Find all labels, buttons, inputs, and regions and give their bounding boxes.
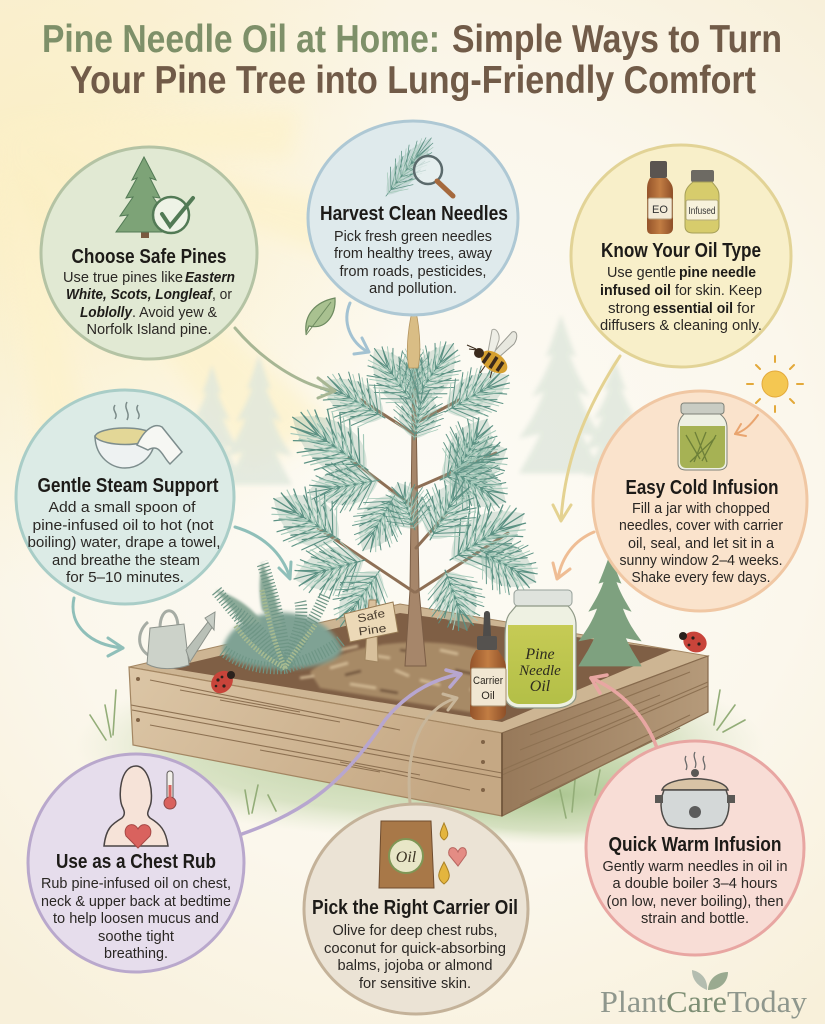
- icon: infused oil bottle: [685, 170, 719, 233]
- body text: Rub pine-infused oil on chest,: [41, 875, 231, 892]
- body text: Add a small spoon of: [48, 499, 196, 516]
- heading: Choose Safe Pines: [72, 246, 226, 268]
- body text: [41, 875, 231, 962]
- arrow: harvest to tree: [347, 303, 369, 354]
- icon: body with heart and thermometer: [104, 766, 176, 848]
- pine needle oil jar: Oil: [530, 678, 551, 695]
- icon: steam bowl: [95, 402, 182, 468]
- arrow: safe pines to tree: [235, 328, 335, 398]
- panel: easy cold infusion: [593, 391, 807, 611]
- pine tree: [257, 305, 550, 666]
- body text: Olive for deep chest rubs,: [332, 922, 498, 939]
- panel: use as a chest rub: [28, 754, 244, 972]
- body text: Eastern: [185, 269, 235, 286]
- title: Simple Ways to Turn: [452, 18, 782, 61]
- icon: EO bottle: [647, 161, 673, 234]
- body text: for: [737, 300, 755, 317]
- icon: floating leaf: [306, 298, 335, 335]
- body text: needles, cover with carrier: [619, 517, 783, 534]
- arrow: carrier oil to bottle: [409, 694, 457, 803]
- heading: Gentle Steam Support: [38, 475, 219, 497]
- body text: . Avoid yew &: [132, 304, 217, 321]
- body text: (on low, never boiling), then: [606, 893, 784, 910]
- body text: strain and bottle.: [641, 910, 749, 927]
- bed top rim: [129, 604, 708, 733]
- icon: slow cooker: [655, 752, 735, 829]
- sign: safe pine: Safe: [356, 608, 386, 625]
- arrow: chest rub to bed: [242, 670, 461, 834]
- body text: Fill a jar with chopped: [632, 500, 770, 517]
- panel: harvest clean needles: [308, 121, 518, 315]
- body text: Loblolly: [80, 304, 133, 321]
- body text: Pick fresh green needles: [334, 228, 492, 245]
- body text: diffusers & cleaning only.: [600, 317, 762, 334]
- ground wash and grass: [75, 653, 765, 845]
- body text: boiling) water, drape a towel,: [28, 534, 221, 551]
- body text: breathing.: [104, 945, 168, 962]
- body text: Shake every few days.: [632, 569, 770, 586]
- body text: , or: [212, 286, 232, 303]
- body text: [28, 499, 221, 586]
- body text: for sensitive skin.: [359, 975, 471, 992]
- raised garden bed: [129, 604, 708, 816]
- arrow: know your oil to bed: [553, 356, 620, 521]
- icon: ladybug right: [679, 628, 710, 656]
- body text: to help loosen mucus and: [53, 910, 219, 927]
- shrub: [216, 562, 342, 669]
- mulch: [300, 642, 520, 712]
- icon: EO bottle: EO: [652, 204, 668, 216]
- panel: choose safe pines: [41, 147, 257, 359]
- icon: sun: [747, 356, 803, 412]
- bed right face: [502, 656, 708, 816]
- body text: from roads, pesticides,: [340, 263, 486, 280]
- body text: from healthy trees, away: [334, 245, 492, 262]
- body text: for skin. Keep: [675, 282, 762, 299]
- body text: neck & upper back at bedtime: [41, 893, 231, 910]
- icon: infusion jar: [678, 403, 727, 470]
- title: Pine Needle Oil at Home:: [42, 18, 440, 61]
- body text: balms, jojoba or almond: [338, 957, 492, 974]
- body text: Norfolk Island pine.: [86, 321, 212, 338]
- icon: bee: [467, 329, 517, 378]
- heading: Know Your Oil Type: [601, 240, 761, 262]
- icon: oil bag with drops and heart: Oil: [396, 849, 417, 866]
- body text: [334, 228, 492, 297]
- icon: pine sprig with magnifier: [374, 129, 453, 205]
- body text: [602, 858, 788, 927]
- body text: strong: [608, 300, 650, 317]
- background misty pine trees: [186, 315, 646, 485]
- arrow: steam to watering can: [73, 598, 123, 656]
- carrier oil bottle: Oil: [481, 690, 495, 702]
- body text: [619, 500, 783, 586]
- pine needle oil jar: [505, 590, 576, 708]
- icon: ladybug left: [207, 666, 237, 698]
- arrow: cold infusion to jar: [553, 532, 594, 579]
- body text: sunny window 2–4 weeks.: [620, 552, 782, 569]
- body text: coconut for quick-absorbing: [324, 940, 506, 957]
- body text: White, Scots, Longleaf: [66, 286, 214, 303]
- body text: [600, 264, 762, 334]
- arrow: steam to tree: [235, 527, 291, 579]
- pine needle oil jar: Pine: [524, 646, 555, 663]
- body text: a double boiler 3–4 hours: [612, 875, 778, 892]
- heading: Harvest Clean Needles: [320, 203, 508, 225]
- body text: essential oil: [653, 300, 733, 317]
- heading: Use as a Chest Rub: [56, 851, 216, 873]
- icon: watering can: [140, 611, 215, 669]
- carrier oil bottle: [470, 611, 506, 720]
- body text: oil, seal, and let sit in a: [628, 535, 775, 552]
- body text: Use true pines like: [63, 269, 183, 286]
- body text: Use gentle: [607, 264, 676, 281]
- pine candle: [407, 305, 420, 368]
- heading: Easy Cold Infusion: [626, 477, 778, 499]
- sign: safe pine: [344, 600, 398, 662]
- body text: and breathe the steam: [52, 552, 200, 569]
- title: [42, 18, 782, 102]
- body text: infused oil: [600, 282, 671, 299]
- logo: plant care today: PlantCareToday: [600, 984, 808, 1019]
- body text: pine-infused oil to hot (not: [32, 517, 214, 534]
- panel: gentle steam support: [16, 390, 234, 604]
- bed soil: [168, 613, 672, 722]
- panel: quick warm infusion: [586, 741, 804, 955]
- sign: safe pine: Pine: [358, 623, 387, 639]
- panel: pick the right carrier oil: [304, 804, 528, 1014]
- body text: [324, 922, 506, 992]
- heading: Quick Warm Infusion: [608, 834, 782, 856]
- small fir in bed: [578, 554, 642, 666]
- icon: oil bag with drops and heart: [379, 821, 466, 888]
- body text: Gently warm needles in oil in: [602, 858, 788, 875]
- body text: soothe tight: [98, 928, 175, 945]
- arrow: sun to jar: [735, 415, 758, 436]
- arrow: warm infusion to jar: [591, 675, 657, 748]
- carrier oil bottle: Carrier: [473, 675, 503, 687]
- heading: Pick the Right Carrier Oil: [312, 897, 518, 919]
- body text: pine needle: [679, 264, 756, 281]
- pine needle oil jar: Needle: [518, 663, 561, 679]
- bed left face: [129, 667, 502, 816]
- panel: know your oil type: [571, 145, 791, 367]
- body text: [63, 269, 235, 338]
- body text: and pollution.: [369, 280, 457, 297]
- body text: for 5–10 minutes.: [66, 569, 184, 586]
- icon: pine tree with check: [116, 157, 193, 238]
- icon: infused oil bottle: Infused: [688, 206, 716, 217]
